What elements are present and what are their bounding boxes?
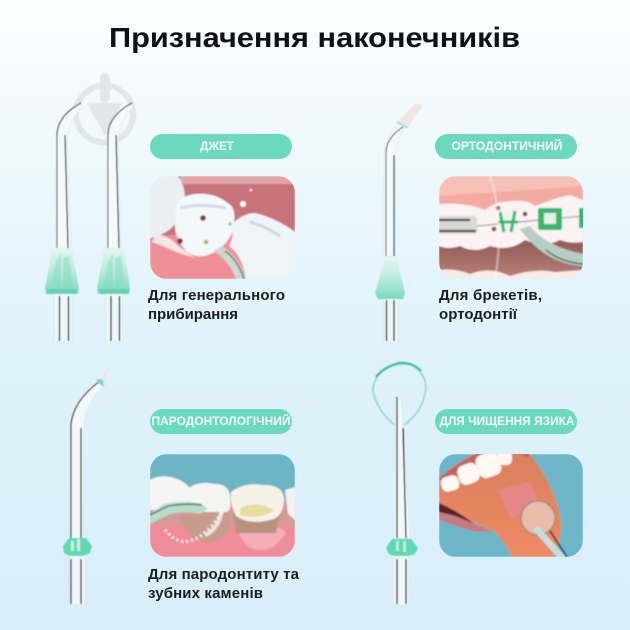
pill label: periodontal: ПАРОДОНТОЛОГІЧНИЙ [152, 415, 290, 428]
tip: jet left [45, 103, 83, 342]
title: Призначення наконечників [109, 22, 520, 53]
photo: tongue cleaning [439, 450, 583, 557]
pill label: jet: ДЖЕТ [200, 141, 234, 153]
tip: jet right [97, 103, 134, 342]
pill label: orthodontic [435, 134, 577, 159]
tip: tongue cleaner [373, 363, 426, 605]
photo: braces [439, 176, 584, 279]
caption: jet: прибирання [148, 306, 238, 323]
caption: orthodontic: ортодонтії [439, 306, 518, 323]
pill label: periodontal [150, 409, 292, 434]
pill label: tongue: ДЛЯ ЧИЩЕННЯ ЯЗИКА [440, 416, 574, 428]
caption: periodontal: Для пародонтиту та [148, 566, 300, 583]
caption: jet: Для генерального [148, 287, 285, 304]
pill label: jet [150, 134, 292, 159]
photo: gums and tartar [150, 454, 295, 557]
panel: jet [148, 134, 295, 323]
pill label: orthodontic: ОРТОДОНТИЧНИЙ [452, 140, 562, 153]
caption: periodontal: зубних каменів [148, 585, 263, 602]
panel: tongue [435, 409, 583, 557]
panel: orthodontic [435, 134, 584, 323]
tip: periodontal [63, 366, 110, 605]
photo: tooth cleaning [150, 176, 295, 279]
panel: periodontal [148, 409, 300, 602]
caption: orthodontic: Для брекетів, [439, 287, 542, 304]
pill label: tongue [435, 409, 577, 434]
tip: orthodontic [375, 103, 423, 342]
watermark icon [76, 73, 133, 142]
